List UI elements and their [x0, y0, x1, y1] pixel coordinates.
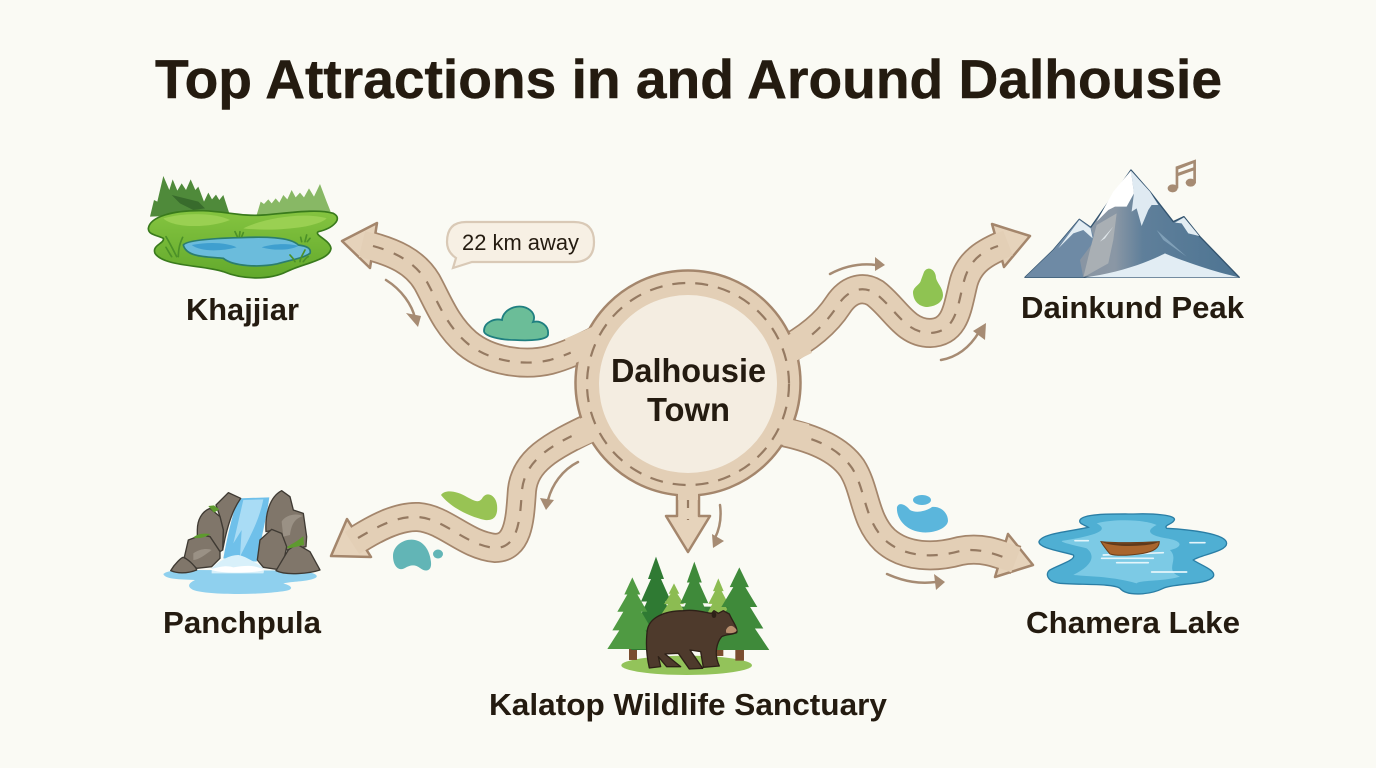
blob: teal-green bush: [484, 307, 548, 340]
icon: music note: [1168, 159, 1196, 192]
blob: green tree shape: [913, 269, 943, 307]
label: Kalatop Wildlife Sanctuary: Kalatop Wildlife Sanctuary: [489, 687, 888, 722]
road to Kalatop Wildlife Sanctuary: [666, 490, 710, 552]
road to Chamera Lake: [778, 431, 1033, 577]
blob: blue water drop: [897, 495, 948, 532]
label: Panchpula: Panchpula: [163, 605, 322, 640]
direction arrow: Panchpula: [540, 462, 578, 510]
direction arrow: Chamera: [887, 574, 945, 590]
label: Chamera Lake: Chamera Lake: [1026, 605, 1240, 640]
icon: Panchpula waterfall: [163, 491, 320, 594]
road to Dainkund Peak: [782, 224, 1030, 352]
label: Khajjiar: Khajjiar: [186, 292, 299, 327]
callout: 22 km away: 22 km away: [462, 230, 579, 255]
hub label: Dalhousie: [611, 352, 766, 389]
icon: Kalatop forest and bear: [607, 557, 769, 675]
direction arrow: Dainkund upper: [830, 257, 885, 274]
blob: teal pond: [393, 540, 443, 570]
callout: 22 km away: [447, 222, 594, 268]
road to Panchpula: [331, 425, 596, 557]
road to Khajjiar: [342, 223, 596, 363]
label: Dainkund Peak: Dainkund Peak: [1021, 290, 1245, 325]
direction arrow: Dainkund lower: [941, 323, 986, 360]
title: Top Attractions in and Around Dalhousie: [155, 48, 1222, 110]
direction arrow: Kalatop: [712, 505, 724, 548]
blob: green shape near Panchpula road: [441, 491, 497, 520]
icon: Chamera Lake with boat: [1039, 514, 1227, 594]
icon: Khajjiar meadow and lake: [148, 176, 337, 278]
central hub: Dalhousie Town: [570, 270, 806, 500]
direction arrow: Khajjiar: [386, 280, 421, 327]
central hub: Dalhousie Town: Town: [647, 391, 730, 428]
icon: Dainkund Peak mountain: [1025, 159, 1239, 277]
